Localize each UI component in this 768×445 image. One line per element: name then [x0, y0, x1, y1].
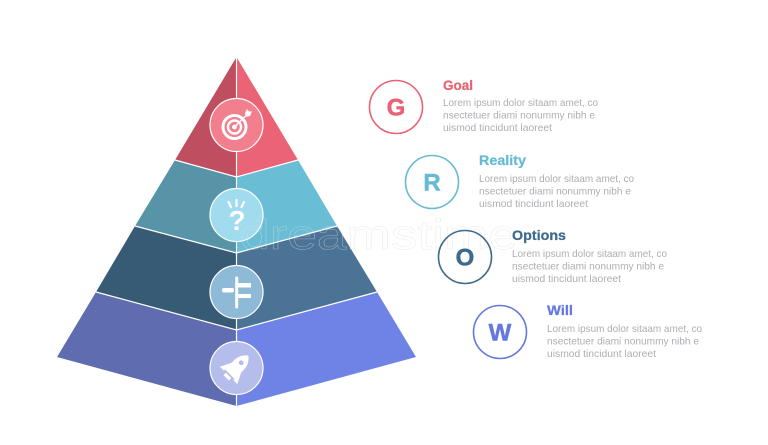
heading: Options: Options	[512, 228, 566, 243]
icon: question mark	[210, 188, 263, 242]
text: reality body: Lorem ipsum dolor sitaam amet, co	[479, 173, 634, 185]
layer: will	[57, 292, 416, 406]
text: reality body: nsectetuer diami nonummy nibh e	[479, 186, 631, 198]
text: will body: nsectetuer diami nonummy nibh e	[547, 336, 699, 348]
text: options body: Lorem ipsum dolor sitaam amet, co	[512, 248, 667, 260]
icon: rocket	[210, 342, 263, 394]
badge: W	[474, 306, 526, 358]
text: reality body	[479, 173, 634, 210]
badge: R	[406, 156, 458, 208]
badge: R: R	[423, 170, 441, 196]
text: will body: Lorem ipsum dolor sitaam amet, co	[547, 323, 702, 335]
text: will body: uismod tincidunt laoreet	[547, 348, 656, 360]
heading: Reality: Reality	[479, 153, 527, 168]
text: will body	[547, 323, 702, 360]
layer: goal	[175, 57, 298, 177]
icon: question mark: ?	[228, 205, 246, 236]
text: options body: nsectetuer diami nonummy nibh e	[512, 260, 664, 272]
watermark: dreamstime	[240, 211, 518, 258]
item: reality	[406, 153, 634, 210]
icon: target	[210, 98, 263, 152]
icon: signpost	[210, 266, 263, 318]
badge: O	[438, 230, 492, 284]
heading: Will: Will	[547, 303, 573, 318]
badge: G: G	[387, 94, 405, 122]
layer: reality	[135, 160, 337, 253]
heading: Goal: Goal	[443, 78, 473, 93]
badge: W: W	[489, 320, 512, 346]
item: options	[438, 228, 667, 285]
item: goal	[370, 78, 598, 134]
text: reality body: uismod tincidunt laoreet	[479, 198, 588, 210]
text: options body: uismod tincidunt laoreet	[512, 273, 621, 285]
badge: G	[370, 80, 422, 134]
text: options body	[512, 248, 667, 285]
text: goal body: nsectetuer diami nonummy nibh e	[443, 110, 595, 122]
text: goal body	[443, 97, 598, 134]
text: goal body: uismod tincidunt laoreet	[443, 122, 552, 134]
text: goal body: Lorem ipsum dolor sitaam amet, co	[443, 97, 598, 109]
pyramid	[57, 57, 416, 407]
layer: options	[96, 226, 377, 330]
badge: O: O	[456, 244, 474, 272]
item: will	[474, 303, 702, 360]
